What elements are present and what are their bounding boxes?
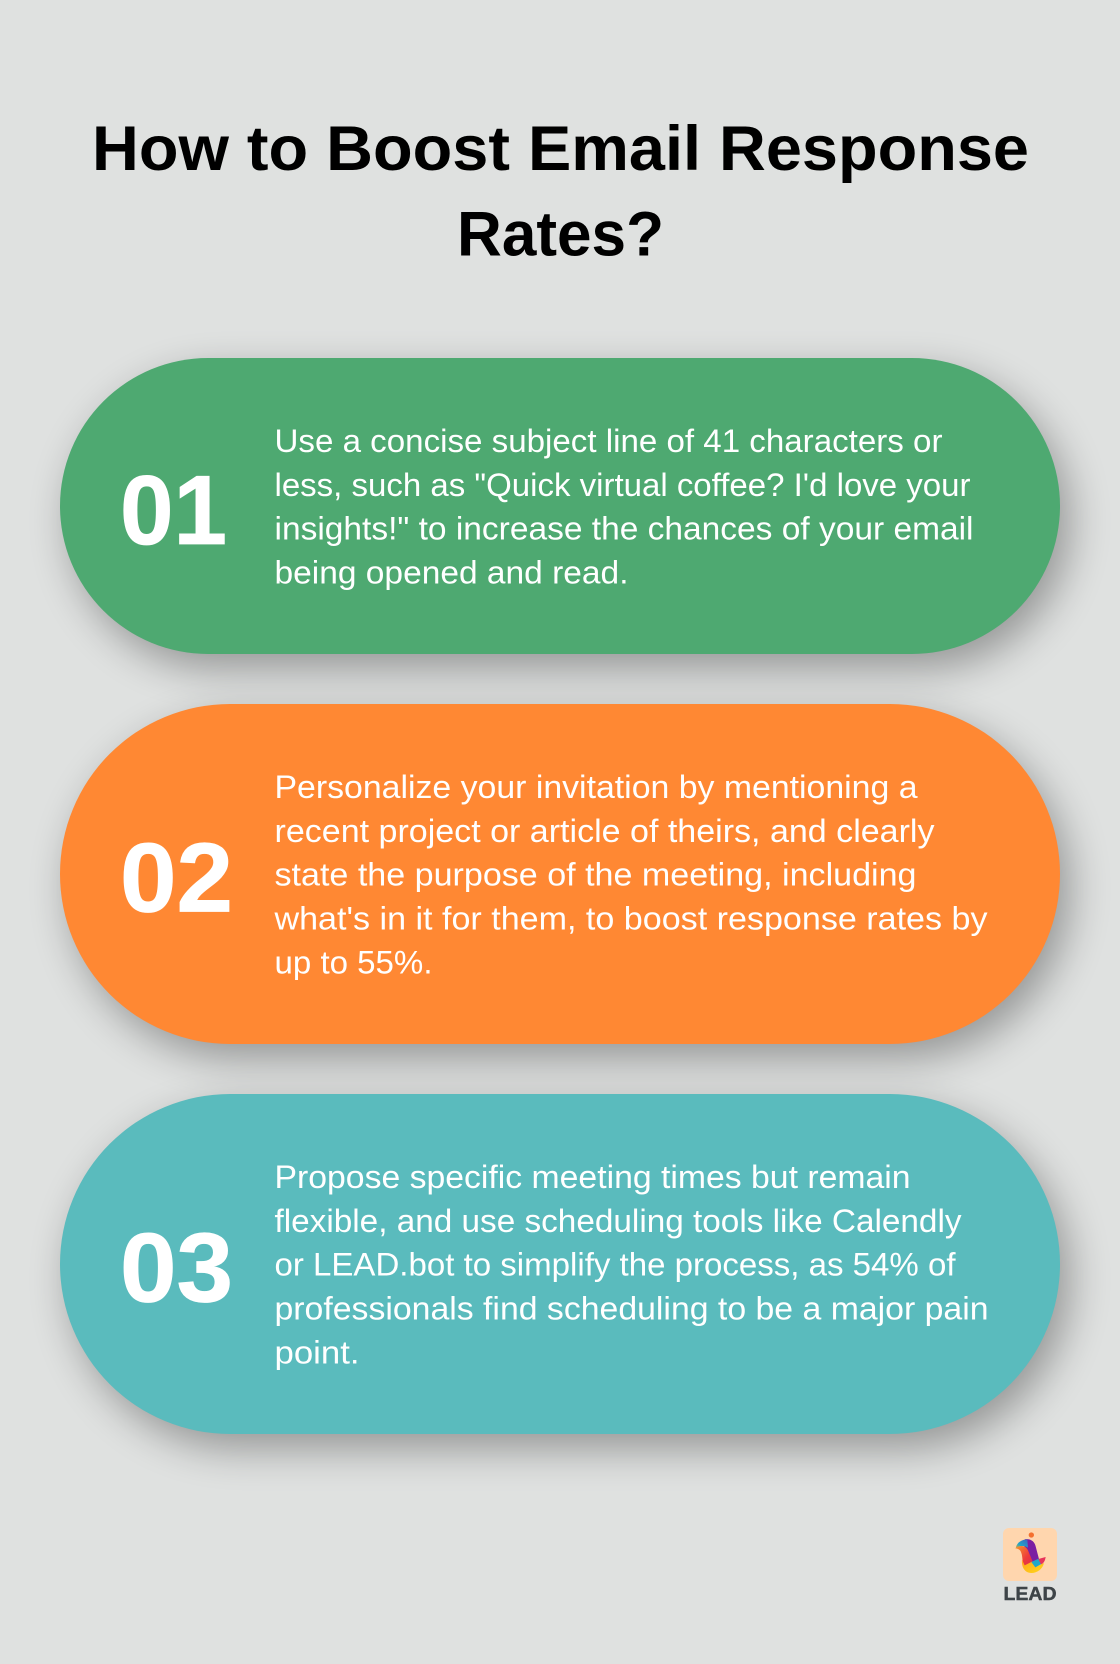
step 01 description (274, 423, 974, 590)
step 02 description: up to 55%. (274, 944, 432, 980)
step 02 description: state the purpose of the meeting, including (274, 857, 916, 893)
step 01 description: being opened and read. (274, 554, 628, 590)
step 03 description: or LEAD.bot to simplify the process, as 54% of (274, 1247, 956, 1283)
step 03 description (274, 1159, 989, 1370)
step 02 description: recent project or article of theirs, and clearly (274, 813, 934, 849)
step 03 description: point. (274, 1334, 360, 1370)
panel: step 03 (60, 1094, 1060, 1434)
step 01 description: Use a concise subject line of 41 characters or (274, 423, 943, 459)
icon: LEAD logo (1003, 1528, 1057, 1604)
step number 01: 01 (120, 455, 227, 565)
logo bird (1015, 1532, 1046, 1573)
step 01 description: insights!" to increase the chances of your email (274, 511, 974, 547)
step 02 description: what's in it for them, to boost response rates by (273, 900, 988, 936)
step 02 description (273, 769, 988, 980)
step 03 description: Propose specific meeting times but remain (274, 1159, 910, 1195)
panel: step 02 (60, 704, 1060, 1044)
step number 02: 02 (120, 823, 233, 933)
logo wordmark: LEAD (1004, 1584, 1056, 1604)
logo tile (1003, 1528, 1057, 1581)
step 01 description: less, such as "Quick virtual coffee? I'd love your (274, 467, 971, 503)
title: Rates? (457, 200, 664, 270)
step number 03: 03 (120, 1213, 233, 1323)
title: How to Boost Email Response (92, 114, 1029, 184)
panel: step 01 (60, 358, 1060, 654)
step 02 description: Personalize your invitation by mentioning a (274, 769, 918, 805)
title (92, 114, 1029, 270)
step 03 description: flexible, and use scheduling tools like Calendly (274, 1203, 962, 1239)
step 03 description: professionals find scheduling to be a major pain (274, 1290, 989, 1326)
